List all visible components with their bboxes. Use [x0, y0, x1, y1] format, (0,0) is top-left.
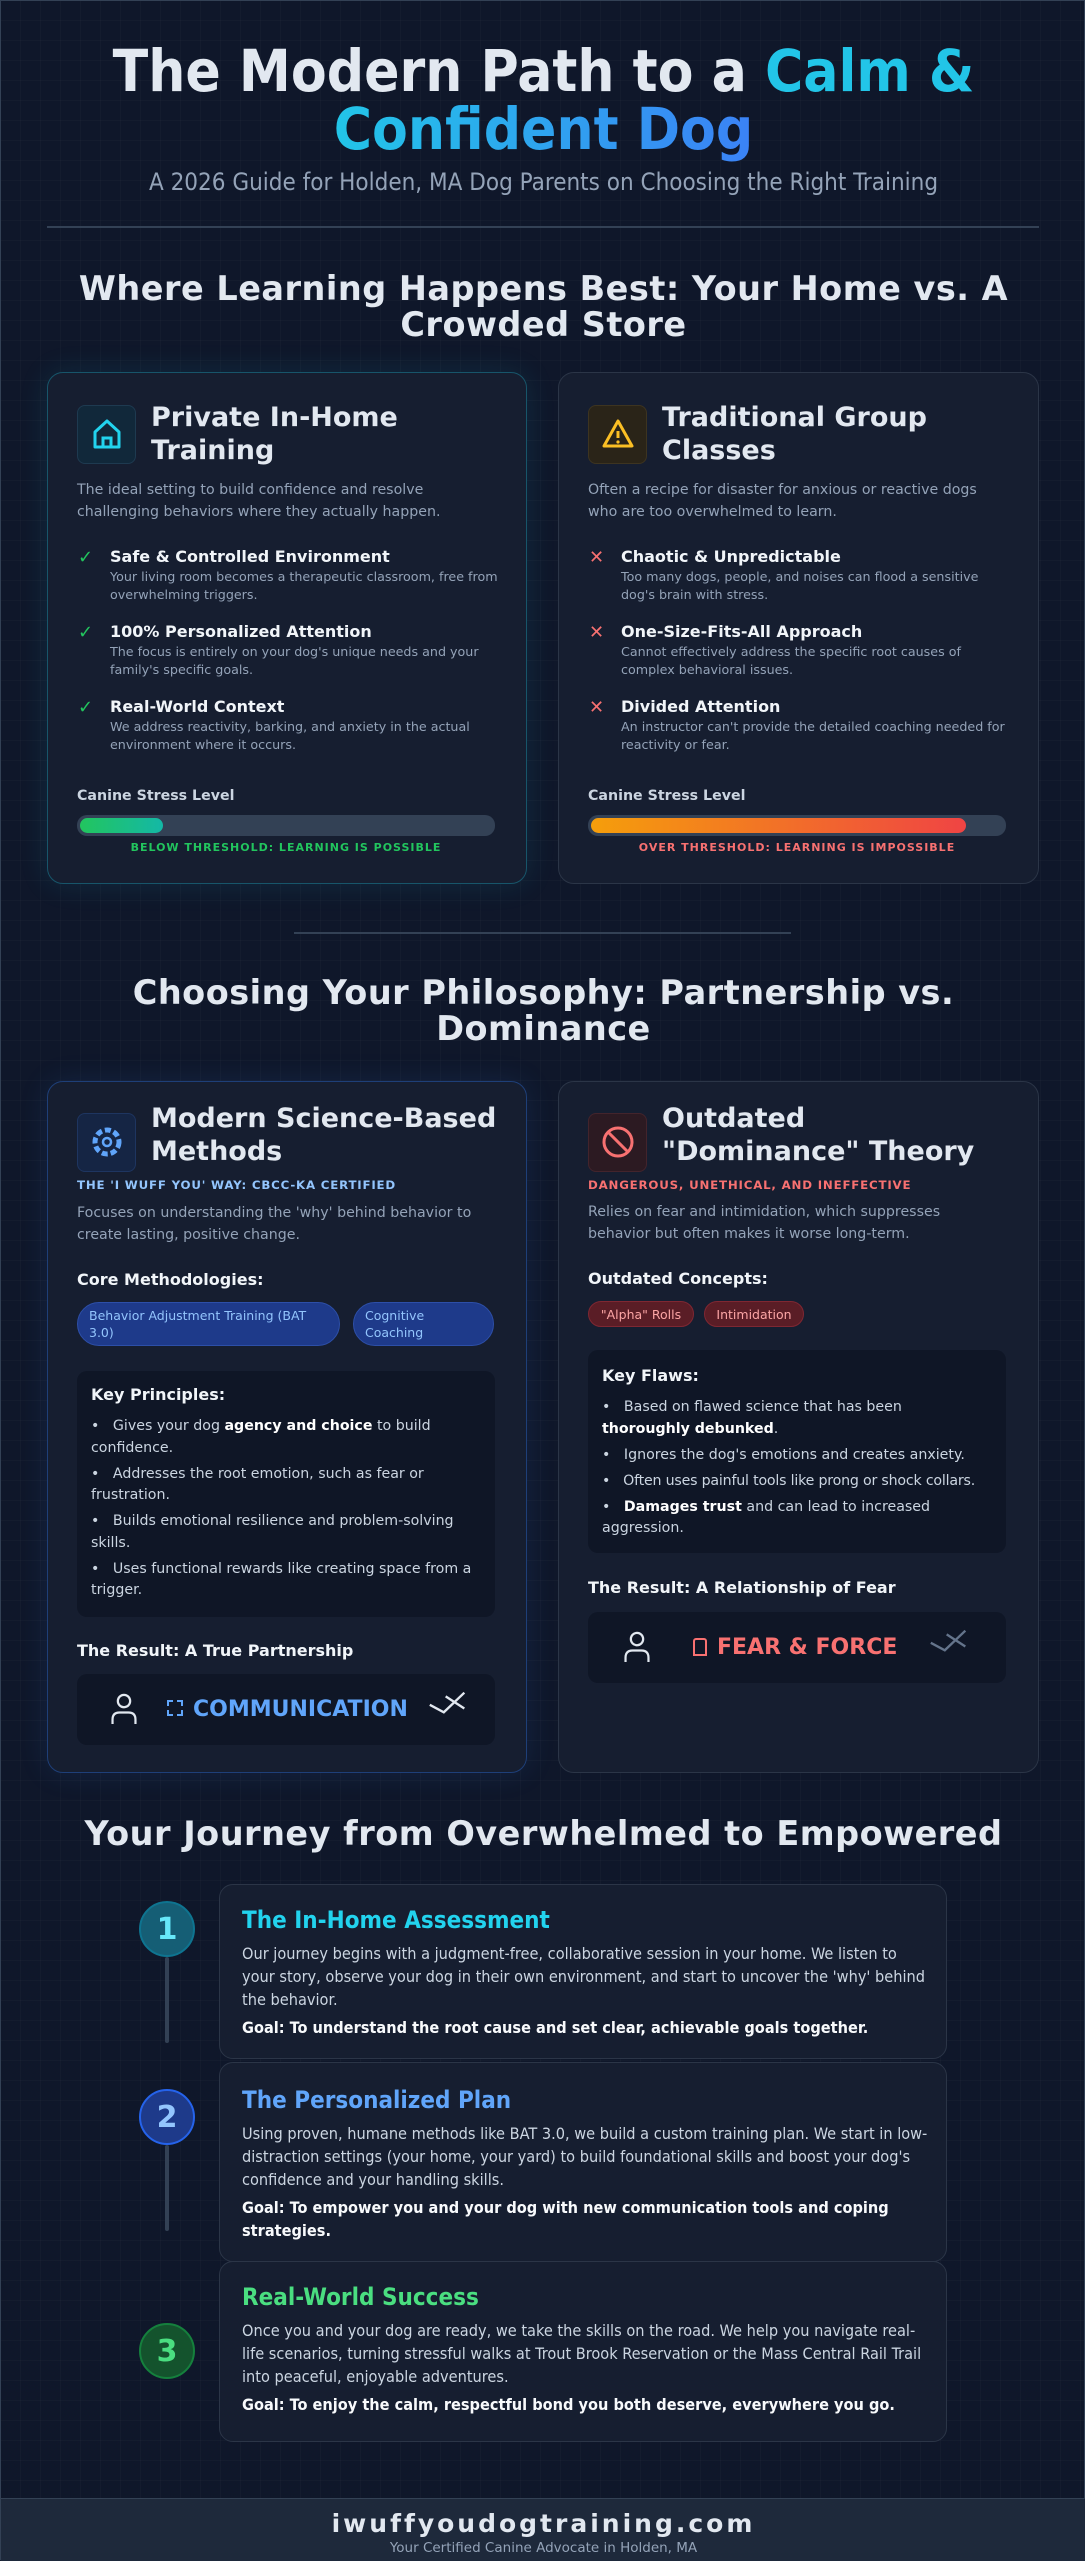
tagline: DANGEROUS, UNETHICAL, AND INEFFECTIVE [588, 1178, 911, 1192]
key flaws box: • Ignores the dog's emotions and creates anxiety. [602, 1446, 965, 1462]
subtitle: A 2026 Guide for Holden, MA Dog Parents on Choosing the Right Training [149, 168, 938, 196]
pills [588, 1301, 694, 1327]
key principles box: Key Principles: [91, 1385, 225, 1404]
title: The Modern Path to a Calm & [113, 37, 974, 105]
icon: person [624, 1632, 650, 1662]
result heading: The Result: A True Partnership [77, 1641, 353, 1660]
panel: traditional group classes [558, 372, 1039, 884]
description [588, 482, 977, 520]
description: Focuses on understanding the 'why' behind behavior to create lasting, positive change. [77, 1205, 471, 1242]
card title: Traditional Group [662, 402, 927, 433]
icon: dog [429, 1692, 465, 1714]
card title: Outdated [662, 1103, 805, 1134]
icon: prohibited [588, 1113, 647, 1172]
icon: brain gear [77, 1113, 136, 1172]
step 2 card [219, 2062, 947, 2262]
benefit items: overwhelming triggers. [110, 587, 258, 602]
card title [151, 402, 398, 466]
step 1 card: Our journey begins with a judgment-free, collaborative session in your home. We listen to [242, 1944, 897, 1963]
description: Often a recipe for disaster for anxious or reactive dogs [588, 482, 977, 498]
description: Relies on fear and intimidation, which suppresses [588, 1204, 940, 1220]
drawback items [589, 547, 1005, 752]
icon: dog [930, 1630, 966, 1652]
step 2 marker [139, 2089, 195, 2145]
core methodologies: Core Methodologies: [77, 1270, 263, 1289]
key flaws box: • Based on flawed science that has been [602, 1399, 902, 1415]
result heading: The Result: A Relationship of Fear [588, 1578, 896, 1597]
step 1 card: the behavior. [242, 1990, 338, 2009]
fear bar [588, 1612, 1006, 1683]
key flaws box: Key Flaws: [602, 1366, 699, 1385]
benefit items: ✓ [78, 622, 93, 643]
step 1 card [219, 1884, 947, 2059]
stress meter: OVER THRESHOLD: LEARNING IS IMPOSSIBLE [639, 841, 955, 854]
drawback items: complex behavioral issues. [621, 662, 793, 677]
key flaws box [588, 1350, 1006, 1553]
tagline: THE 'I WUFF YOU' WAY: CBCC-KA CERTIFIED [77, 1178, 396, 1192]
benefit items: family's specific goals. [110, 662, 253, 677]
description [588, 1204, 940, 1242]
title [112, 37, 974, 163]
step 3 card: Goal: To enjoy the calm, respectful bond you both deserve, everywhere you go. [242, 2395, 895, 2414]
card title: Private In-Home [151, 402, 398, 433]
card title [151, 1103, 496, 1167]
drawback items: Cannot effectively address the specific root causes of [621, 644, 961, 659]
card title [662, 1103, 974, 1167]
benefit items: Real-World Context [110, 697, 284, 716]
stress meter: Canine Stress Level [77, 788, 234, 804]
drawback items: An instructor can't provide the detailed coaching needed for [621, 719, 1005, 734]
heading: where learning happens [79, 269, 1008, 344]
description: who are too overwhelmed to learn. [588, 504, 837, 520]
icon: person [111, 1694, 137, 1724]
step 2 card: Goal: To empower you and your dog with new communication tools and coping [242, 2198, 889, 2217]
stress meter [588, 788, 1006, 854]
description: behavior but often makes it worse long-term. [588, 1226, 910, 1242]
step 3 card: Real-World Success [242, 2283, 479, 2311]
pills [77, 1302, 340, 1346]
step 1 card: your story, observe your dog in their own environment, and start to uncover the 'why' behind [242, 1967, 925, 1986]
footer: iwuffyoudogtraining.com [332, 2509, 755, 2538]
step 2 card: The Personalized Plan [242, 2086, 511, 2114]
card title: Modern Science-Based [151, 1103, 496, 1134]
benefit items: ✓ [78, 547, 93, 568]
description [76, 482, 440, 520]
title: Confident Dog [334, 95, 753, 163]
stress meter: BELOW THRESHOLD: LEARNING IS POSSIBLE [131, 841, 441, 854]
drawback items: One-Size-Fits-All Approach [621, 622, 862, 641]
key flaws box: • Damages trust and can lead to increased [602, 1498, 930, 1514]
drawback items: dog's brain with stress. [621, 587, 768, 602]
benefit items [78, 547, 498, 752]
card title: Training [151, 435, 274, 466]
benefit items: The focus is entirely on your dog's unique needs and your [110, 644, 479, 659]
footer: Your Certified Canine Advocate in Holden, MA [390, 2540, 697, 2556]
key flaws box: thoroughly debunked. [602, 1420, 778, 1436]
key principles box: • Builds emotional resilience and problem-solving [91, 1513, 454, 1529]
benefit items: Safe & Controlled Environment [110, 547, 390, 566]
pills: "Alpha" Rolls [601, 1307, 681, 1322]
heading: where learning happens: Crowded Store [400, 305, 687, 344]
panel: private in-home training [47, 372, 527, 884]
pills: Behavior Adjustment Training (BAT 3.0) [89, 1308, 306, 1340]
card title: Classes [662, 435, 776, 466]
key principles box: • Gives your dog agency and choice to build [91, 1418, 431, 1434]
drawback items: Too many dogs, people, and noises can flood a sensitive [621, 569, 978, 584]
key principles box: frustration. [91, 1487, 170, 1503]
card title [662, 402, 927, 466]
key flaws box: • Often uses painful tools like prong or shock collars. [602, 1472, 975, 1488]
key principles box: • Addresses the root emotion, such as fear or [91, 1466, 424, 1482]
key principles box [77, 1371, 495, 1617]
benefit items: 100% Personalized Attention [110, 622, 372, 641]
card title: "Dominance" Theory [662, 1136, 974, 1167]
step 2 card: confidence and your handling skills. [242, 2170, 504, 2189]
step 2 card: strategies. [242, 2221, 331, 2240]
key principles box: trigger. [91, 1582, 142, 1598]
description: The ideal setting to build confidence and resolve [77, 482, 423, 498]
heading: choosing your philosophy [133, 973, 954, 1048]
heading: choosing your philosophy: Choosing Your Philosophy: Partnership vs. [133, 973, 954, 1012]
benefit items: Your living room becomes a therapeutic classroom, free from [110, 569, 498, 584]
step 1 marker [139, 1901, 195, 1957]
step 3 marker [139, 2323, 195, 2379]
step 3 card: Once you and your dog are ready, we take the skills on the road. We help you navigate real- [242, 2321, 915, 2340]
stress meter [77, 788, 495, 854]
drawback items: Divided Attention [621, 697, 780, 716]
benefit items: We address reactivity, barking, and anxiety in the actual [110, 719, 470, 734]
outdated concepts: Outdated Concepts: [588, 1269, 768, 1288]
step 1 marker: 1 [157, 1912, 177, 1947]
drawback items: reactivity or fear. [621, 737, 730, 752]
drawback items: ✕ [589, 697, 604, 718]
key principles box: confidence. [91, 1440, 173, 1456]
communication bar [77, 1674, 495, 1745]
heading: where learning happens: Where Learning Happens Best: Your Home vs. A [79, 269, 1008, 308]
panel: modern science-based methods [47, 1081, 527, 1773]
step 3 card: into peaceful, enjoyable adventures. [242, 2367, 509, 2386]
panel: outdated dominance theory: Intimidation [716, 1307, 792, 1322]
step 3 card: life scenarios, turning stressful walks at Trout Brook Reservation or the Mass Central Rail Trail [242, 2344, 921, 2363]
key principles box: skills. [91, 1534, 130, 1550]
heading: your journey: Your Journey from Overwhelmed to Empowered [84, 1814, 1003, 1853]
fear bar: FEAR & FORCE [717, 1635, 897, 1660]
step 2 card: Using proven, humane methods like BAT 3.0, we build a custom training plan. We start in low- [242, 2124, 927, 2143]
footer [1, 2498, 1085, 2561]
panel: outdated dominance theory [558, 1081, 1039, 1773]
panel: modern science-based methods: Cognitive Coaching [365, 1308, 424, 1340]
step 1 card: Goal: To understand the root cause and set clear, achievable goals together. [242, 2018, 868, 2037]
step 2 marker: 2 [157, 2100, 177, 2135]
benefit items: environment where it occurs. [110, 737, 296, 752]
stress meter: Canine Stress Level [588, 788, 745, 804]
step 2 card: distraction settings (your home, your yard) to build foundational skills and boost your dog's [242, 2147, 910, 2166]
benefit items: ✓ [78, 697, 93, 718]
communication bar: COMMUNICATION [193, 1697, 408, 1722]
key principles box: • Uses functional rewards like creating space from a [91, 1560, 471, 1576]
step 3 marker: 3 [157, 2334, 177, 2369]
icon: warning [588, 405, 647, 464]
card title: Methods [151, 1136, 282, 1167]
step 3 card [219, 2261, 947, 2442]
icon: house [77, 405, 136, 464]
step 1 card: The In-Home Assessment [242, 1906, 550, 1934]
drawback items: Chaotic & Unpredictable [621, 547, 841, 566]
key flaws box: aggression. [602, 1520, 684, 1536]
drawback items: ✕ [589, 622, 604, 643]
description: challenging behaviors where they actually happen. [77, 504, 440, 520]
heading: choosing your philosophy: Dominance [436, 1009, 651, 1048]
drawback items: ✕ [589, 547, 604, 568]
